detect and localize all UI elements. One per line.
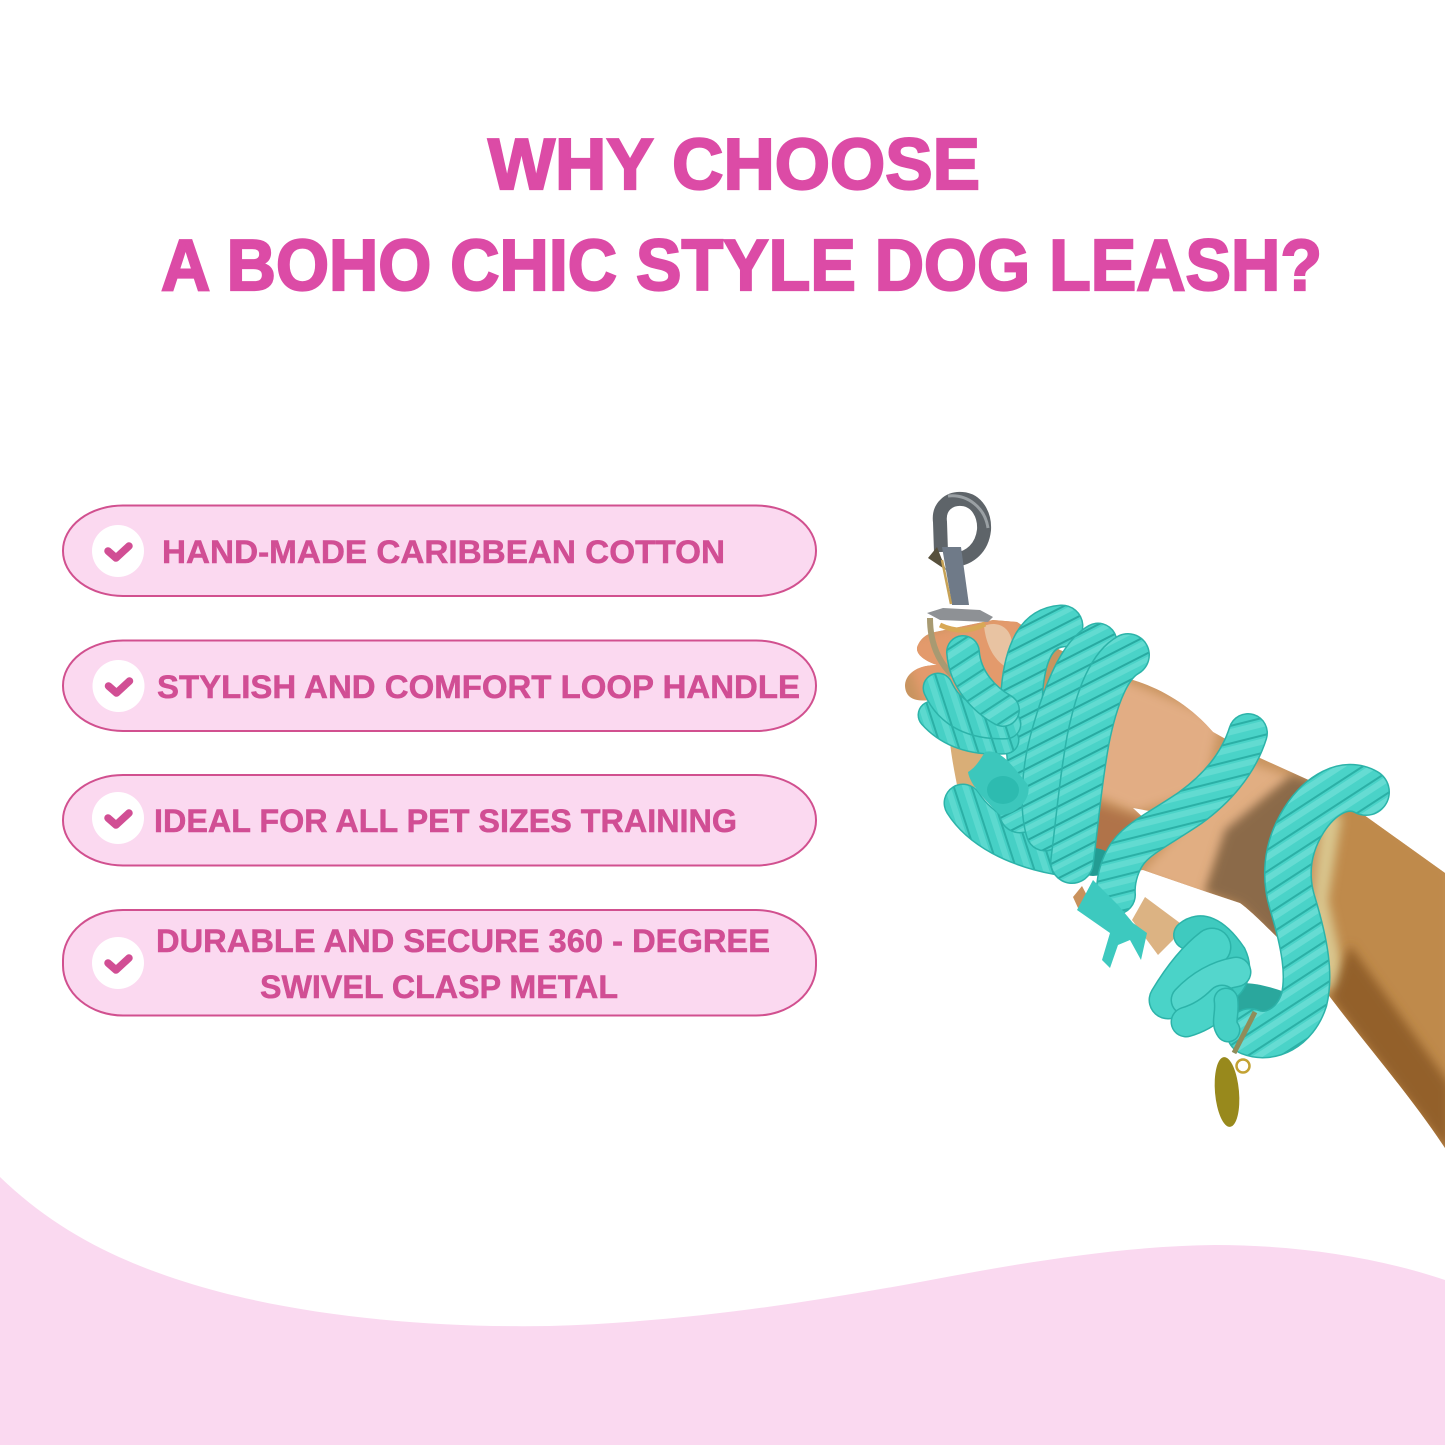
- rope shadow patch: [1073, 848, 1113, 876]
- clasp shank gold edge: [942, 560, 951, 604]
- thumb nail: [984, 624, 1012, 667]
- clasp hook: [940, 499, 984, 560]
- knot top strand: [1188, 930, 1235, 990]
- clasp swivel plate: [927, 608, 993, 622]
- icon: check mark: [108, 958, 129, 970]
- title: [161, 125, 1322, 306]
- rope strand: three: [1072, 655, 1128, 862]
- wrist shadow band: [1205, 775, 1320, 945]
- icon: check mark: [108, 546, 129, 558]
- white gap between hand and palm: [1133, 808, 1160, 822]
- small jump ring: [1236, 1060, 1250, 1072]
- sunlit wrist: [1142, 762, 1290, 892]
- rope strand: one: [1020, 626, 1062, 812]
- rope strand: lower curve: [963, 803, 1058, 856]
- tan binding wrap lower: [1132, 897, 1180, 955]
- arm and hand: [900, 610, 1445, 1155]
- title line 1: WHY CHOOSE: [488, 125, 980, 205]
- clasp hook highlight: [948, 496, 988, 528]
- frayed rope tassel upper: [968, 751, 1029, 815]
- knot third strand: [1186, 1000, 1222, 1022]
- dark under strand: [1225, 983, 1285, 1018]
- back of hand: [1102, 680, 1220, 814]
- oval tag: [1212, 1056, 1242, 1128]
- feature pill: pet sizes: [63, 775, 816, 866]
- feature text: STYLISH AND COMFORT LOOP HANDLE: [157, 669, 800, 705]
- feature pill: loop handle: [63, 640, 816, 731]
- title line 2: A BOHO CHIC STYLE DOG LEASH?: [161, 226, 1322, 306]
- feature text line 2: SWIVEL CLASP METAL: [260, 969, 618, 1005]
- photo: hand holding teal rope leash: [900, 496, 1445, 1155]
- tassel fibres: [1077, 880, 1147, 968]
- bottom wave background: [0, 1177, 1445, 1445]
- rope strand: right wrap: [1250, 788, 1366, 1034]
- feature pill: swivel clasp: [63, 910, 816, 1016]
- rope strand: long diagonal: [1116, 733, 1248, 895]
- clasp thumb latch: [928, 547, 946, 570]
- knot second strand: [1186, 972, 1236, 1000]
- tag ring: [1234, 1012, 1255, 1053]
- palm in shadow: [1096, 802, 1140, 851]
- icon: check mark: [108, 813, 129, 825]
- fingers: [909, 620, 1021, 700]
- knot fourth strand: [1225, 1000, 1228, 1030]
- feature pill: cotton: [63, 506, 816, 596]
- frayed tassel lower: [1073, 880, 1147, 968]
- feature text: HAND-MADE CARIBBEAN COTTON: [162, 534, 725, 570]
- tan rope tip: [1073, 886, 1092, 908]
- clasp D ring: [930, 618, 952, 675]
- knot main strand: [1168, 947, 1212, 1000]
- clasp shank: [942, 547, 969, 605]
- forearm: [1328, 812, 1445, 1148]
- forearm lower shadow: [1330, 945, 1445, 1155]
- rope strand: two: [1041, 642, 1098, 832]
- brass tag and ring: [1212, 1012, 1255, 1128]
- tan binding wrap upper: [950, 743, 993, 790]
- feature text: IDEAL FOR ALL PET SIZES TRAINING: [154, 803, 737, 839]
- rope loop knot: [932, 652, 1006, 740]
- brass fitting: [940, 624, 985, 630]
- feature text line 1: DURABLE AND SECURE 360 - DEGREE: [156, 923, 770, 959]
- forearm light edge near rope: [1310, 812, 1348, 992]
- icon: check mark: [108, 681, 130, 693]
- rope lower knot: [1168, 930, 1236, 1030]
